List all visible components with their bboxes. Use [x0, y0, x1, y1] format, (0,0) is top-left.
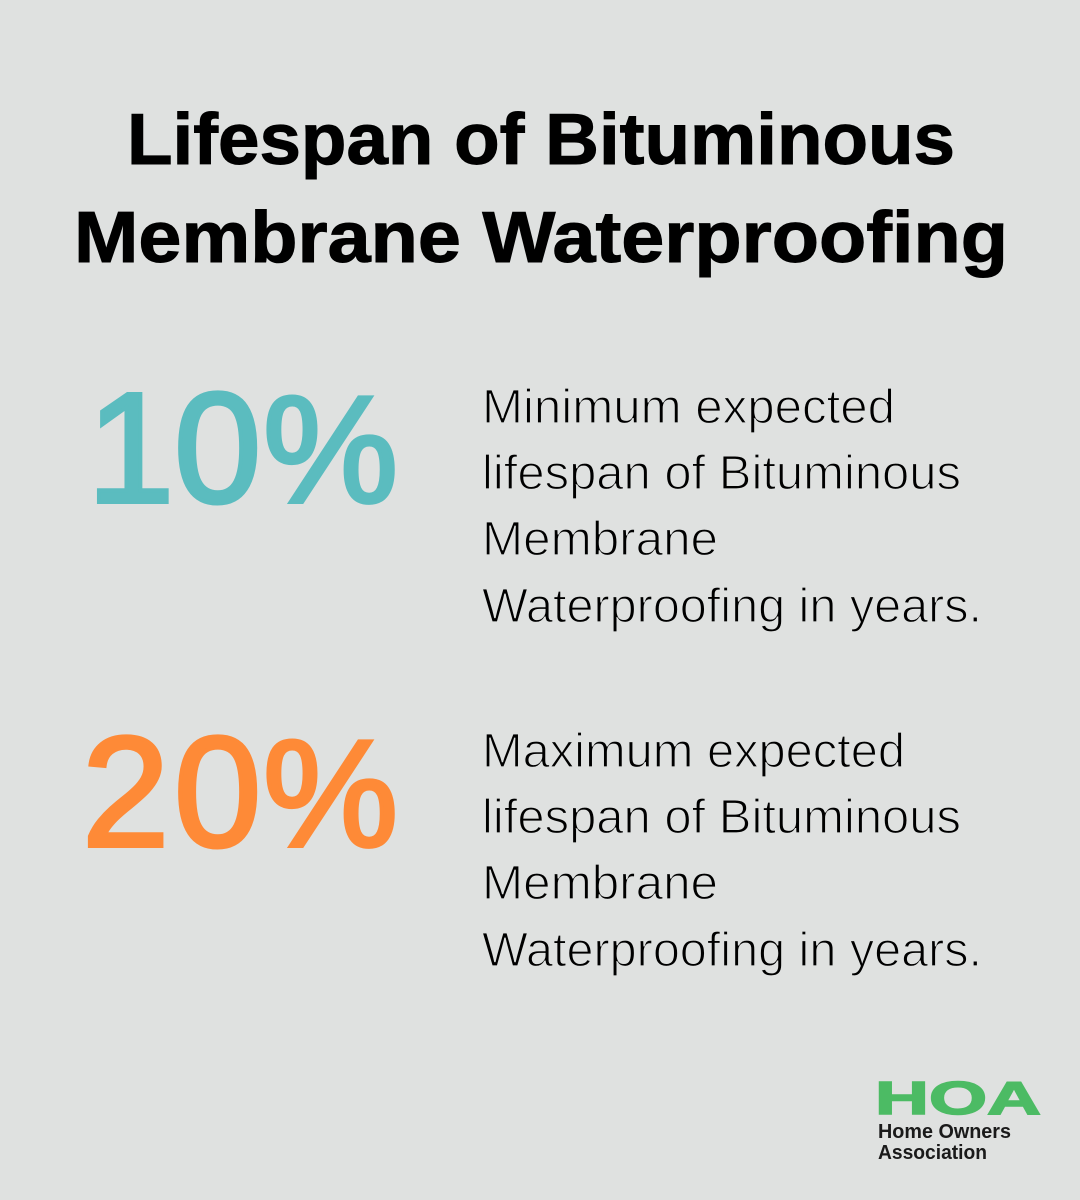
- stat: 20%: %: [263, 709, 398, 879]
- title: Membrane Waterproofing: [74, 198, 1008, 278]
- logo: HOA Home Owners Association: Home Owners: [878, 1121, 1011, 1143]
- description: minimum lifespan: Membrane: [482, 513, 718, 566]
- description: minimum lifespan: Minimum expected: [482, 381, 895, 434]
- logo: HOA Home Owners Association: Association: [878, 1142, 987, 1164]
- description: maximum lifespan: Waterproofing in years.: [482, 924, 982, 977]
- stat: 20%: 20: [82, 705, 261, 880]
- logo: HOA Home Owners Association: HOA: [875, 1072, 1041, 1124]
- description: maximum lifespan: lifespan of Bituminous: [482, 791, 961, 844]
- description: maximum lifespan: Maximum expected: [482, 725, 905, 778]
- description: minimum lifespan: Waterproofing in years.: [482, 580, 982, 633]
- description: maximum lifespan: [482, 725, 982, 977]
- logo: HOA Home Owners Association: [875, 1072, 1041, 1164]
- description: minimum lifespan: lifespan of Bituminous: [482, 447, 961, 500]
- title: [74, 100, 1008, 278]
- stat: 10%: %: [263, 365, 398, 535]
- description: minimum lifespan: [482, 381, 982, 633]
- stat: 10%: 10: [87, 361, 261, 536]
- description: maximum lifespan: Membrane: [482, 857, 718, 910]
- title: Lifespan of Bituminous: [127, 100, 955, 180]
